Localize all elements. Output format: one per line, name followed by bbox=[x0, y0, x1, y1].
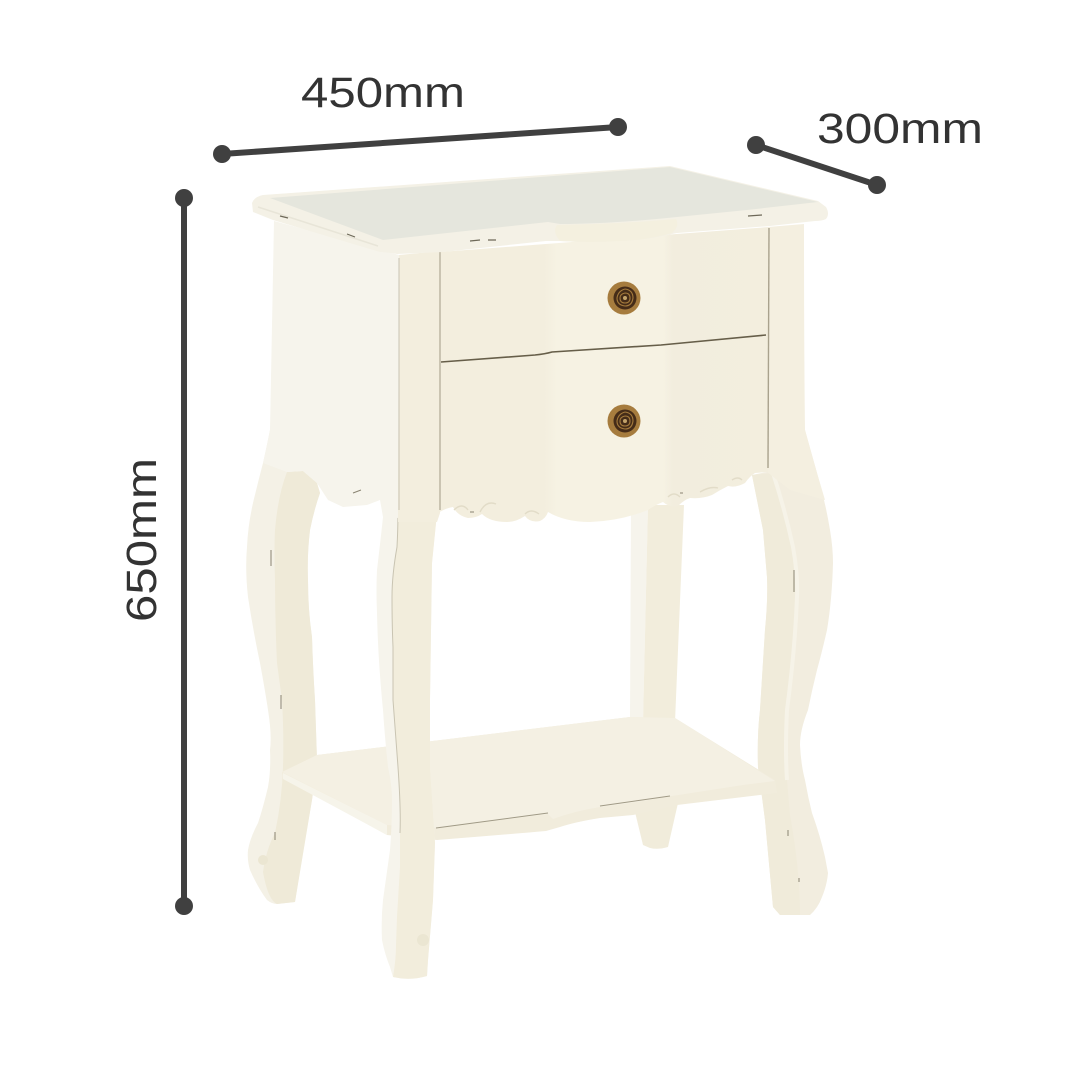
label: depth: 300mm bbox=[817, 105, 983, 153]
distress marks bbox=[271, 490, 799, 882]
back left leg bbox=[246, 430, 320, 904]
illustration: cream bedside table bbox=[246, 166, 833, 979]
front centre leg bbox=[376, 505, 437, 979]
knob: lower drawer bbox=[608, 404, 640, 438]
back right leg bbox=[630, 505, 684, 849]
knob: upper drawer bbox=[608, 282, 640, 314]
lower shelf bbox=[282, 717, 777, 840]
drawer outlines bbox=[440, 228, 769, 510]
front right leg bbox=[752, 430, 833, 915]
front post bbox=[398, 251, 441, 522]
label: height: 650mm bbox=[118, 458, 166, 622]
label: width: 450mm bbox=[301, 69, 465, 117]
table top bbox=[252, 166, 828, 254]
drawer fronts with carved apron bbox=[438, 227, 769, 522]
width dimension arrow bbox=[213, 118, 627, 163]
height dimension arrow bbox=[175, 189, 193, 915]
carved scroll trim bbox=[454, 478, 742, 514]
left side panel bbox=[263, 221, 399, 518]
right post bbox=[767, 224, 825, 500]
depth dimension arrow bbox=[747, 136, 886, 194]
